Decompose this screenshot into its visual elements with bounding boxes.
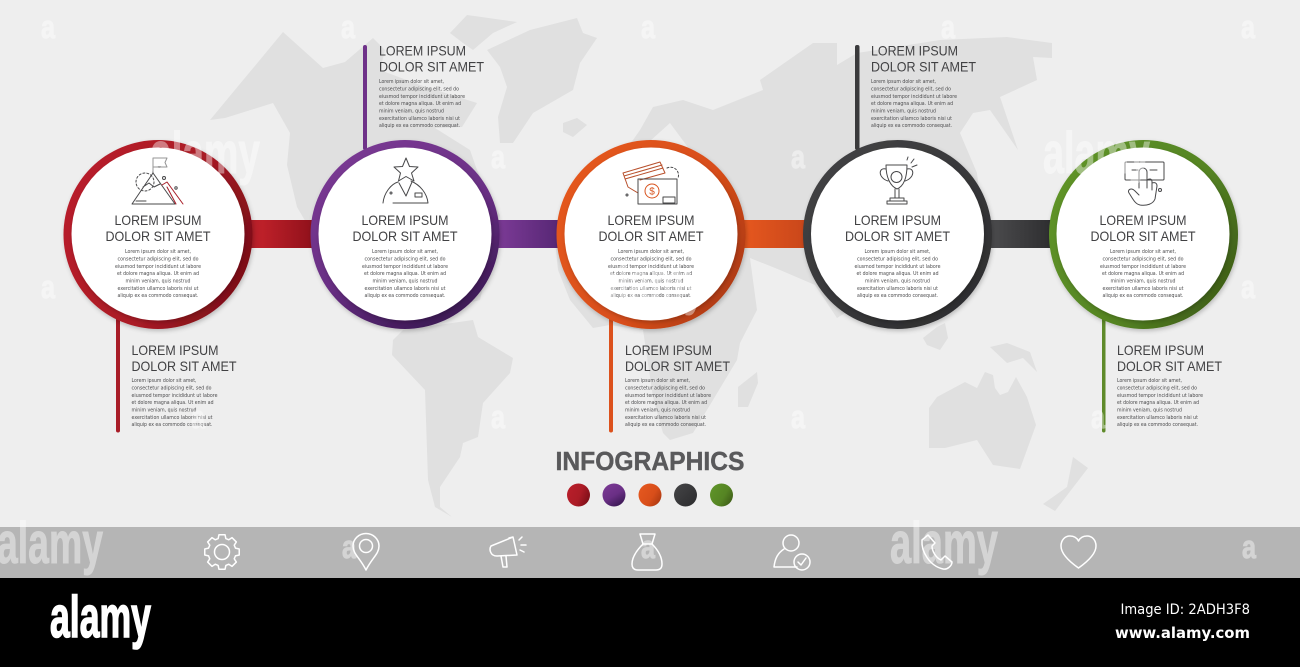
heading: LOREM IPSUM	[114, 212, 202, 228]
watermark overlay: a	[791, 139, 805, 175]
side text block: red: eiusmod tempor incididunt ut labore	[132, 393, 218, 399]
side text block: red	[132, 342, 237, 428]
icon: money bag	[632, 534, 662, 570]
side text block: orange: consectetur adipiscing elit, sed do	[625, 385, 705, 391]
body text: consectetur adipiscing elit, sed do	[857, 256, 938, 262]
icon: location pin	[353, 534, 379, 570]
watermark overlay: a	[41, 9, 55, 45]
side text block: green: DOLOR SIT AMET	[1117, 358, 1222, 374]
side text block: green: minim veniam, quis nostrud	[1117, 408, 1182, 414]
body text: et dolore magna aliqua. Ut enim ad	[117, 271, 199, 277]
body text: minim veniam, quis nostrud	[372, 278, 438, 284]
body text: consectetur adipiscing elit, sed do	[364, 256, 446, 262]
watermark overlay: a	[41, 269, 55, 305]
side text block: green: exercitation ullamco laboris nisi ut	[1117, 415, 1198, 421]
side text block: charcoal: DOLOR SIT AMET	[871, 58, 976, 74]
watermark overlay: alamy	[597, 251, 705, 316]
side text block: orange: DOLOR SIT AMET	[625, 358, 730, 374]
circle 1: red	[64, 140, 252, 329]
side text block: purple: Lorem ipsum dolor sit amet,	[379, 79, 444, 85]
side text block: purple	[379, 42, 484, 129]
body text: exercitation ullamco laboris nisi ut	[118, 286, 198, 292]
watermark overlay: a	[341, 9, 355, 45]
footer image id: Image ID: 2ADH3F8	[1120, 602, 1250, 618]
body text	[854, 249, 940, 299]
body text: eiusmod tempor incididunt ut labore	[115, 264, 201, 270]
black footer	[0, 578, 1300, 667]
watermark overlay: a	[1091, 399, 1105, 435]
body text: Lorem ipsum dolor sit amet,	[618, 249, 684, 255]
body text: exercitation ullamco laboris nisi ut	[610, 286, 692, 292]
side text block: charcoal: consectetur adipiscing elit, sed do	[871, 86, 951, 92]
circle 5: green: DOLOR SIT AMET	[1090, 228, 1196, 244]
body text: exercitation ullamco laboris nisi ut	[857, 286, 938, 292]
circle 4: charcoal: DOLOR SIT AMET	[845, 228, 950, 244]
body text: eiusmod tempor incididunt ut labore	[362, 264, 448, 270]
side text block: red: LOREM IPSUM	[132, 342, 218, 358]
body text: Lorem ipsum dolor sit amet,	[864, 249, 931, 255]
side text block: purple: aliquip ex ea commodo consequat.	[379, 123, 460, 129]
title: INFOGRAPHICS	[556, 448, 744, 476]
page background	[0, 0, 1300, 527]
body text: exercitation ullamco laboris nisi ut	[364, 286, 446, 292]
side text block: charcoal: minim veniam, quis nostrud	[871, 108, 936, 114]
colour legend dots	[567, 484, 733, 506]
side text block: purple: eiusmod tempor incididunt ut labore	[379, 94, 465, 100]
icon: card and money	[623, 162, 679, 204]
side text block: charcoal: Lorem ipsum dolor sit amet,	[871, 79, 936, 85]
body text: aliquip ex ea commodo consequat.	[610, 293, 692, 299]
body text: Lorem ipsum dolor sit amet,	[372, 249, 438, 255]
side text block: red: Lorem ipsum dolor sit amet,	[132, 378, 197, 384]
body text	[1100, 249, 1186, 299]
heading: LOREM IPSUM	[854, 212, 941, 228]
icon: gear	[205, 535, 239, 569]
watermark overlay: alamy	[1043, 121, 1150, 186]
icon: mountain with flag	[132, 158, 183, 204]
icon: star and person	[383, 158, 428, 203]
side text block: purple: LOREM IPSUM	[379, 42, 466, 58]
side text block: green: eiusmod tempor incididunt ut labore	[1117, 393, 1203, 399]
circle 2: purple	[310, 140, 500, 329]
icon: heart	[1061, 536, 1096, 568]
side text block: red: aliquip ex ea commodo consequat.	[132, 422, 213, 428]
body text: et dolore magna aliqua. Ut enim ad	[610, 271, 692, 277]
heading: LOREM IPSUM	[608, 212, 694, 228]
circle 5: green	[1049, 140, 1238, 329]
watermark overlay: alamy	[150, 121, 260, 186]
watermark overlay: a	[1241, 9, 1255, 45]
footer logo: alamy	[50, 585, 151, 650]
circle 3: orange: DOLOR SIT AMET	[598, 228, 704, 244]
heading: LOREM IPSUM	[1100, 212, 1186, 228]
side text block: green: Lorem ipsum dolor sit amet,	[1117, 378, 1182, 384]
watermark overlay: a	[941, 9, 955, 45]
side text block: red: et dolore magna aliqua. Ut enim ad	[132, 400, 214, 406]
body text: Lorem ipsum dolor sit amet,	[125, 249, 191, 255]
side text block: orange: exercitation ullamco laboris nisi ut	[625, 415, 706, 421]
footer url: www.alamy.com	[1115, 624, 1250, 642]
body text: et dolore magna aliqua. Ut enim ad	[856, 271, 938, 277]
side text block: charcoal	[871, 42, 976, 129]
side text block: green: et dolore magna aliqua. Ut enim ad	[1117, 400, 1199, 406]
side text block: orange: LOREM IPSUM	[625, 342, 712, 358]
body text: et dolore magna aliqua. Ut enim ad	[364, 271, 446, 277]
body text: exercitation ullamco laboris nisi ut	[1102, 286, 1184, 292]
icon band	[0, 527, 1300, 578]
circle 1: red: DOLOR SIT AMET	[106, 228, 211, 244]
side text block: red: minim veniam, quis nostrud	[132, 408, 196, 414]
side text block: red: consectetur adipiscing elit, sed do	[132, 385, 212, 391]
side text block: green: consectetur adipiscing elit, sed do	[1117, 385, 1197, 391]
watermark overlay: a	[641, 9, 655, 45]
body text: eiusmod tempor incididunt ut labore	[608, 264, 694, 270]
body text: eiusmod tempor incididunt ut labore	[854, 264, 940, 270]
side text block: purple: exercitation ullamco laboris nisi ut	[379, 116, 460, 122]
side text block: green: aliquip ex ea commodo consequat.	[1117, 422, 1198, 428]
body text	[115, 249, 201, 299]
side text block: charcoal: aliquip ex ea commodo consequat.	[871, 123, 952, 129]
side text block: red: exercitation ullamco laboris nisi ut	[132, 415, 212, 421]
world map background	[210, 15, 1088, 517]
body text: aliquip ex ea commodo consequat.	[857, 293, 938, 299]
side text block: orange: Lorem ipsum dolor sit amet,	[625, 378, 690, 384]
side text block: orange: aliquip ex ea commodo consequat.	[625, 422, 706, 428]
circle 4: charcoal	[803, 140, 992, 329]
watermark overlay: a	[641, 529, 655, 565]
connector bars between circles	[245, 220, 1055, 248]
body text: minim veniam, quis nostrud	[865, 278, 930, 284]
icon: hand and banknote	[1125, 162, 1164, 205]
body text: minim veniam, quis nostrud	[618, 278, 684, 284]
side text block: red: DOLOR SIT AMET	[132, 358, 237, 374]
side text block: orange: minim veniam, quis nostrud	[625, 408, 690, 414]
side text block: charcoal: LOREM IPSUM	[871, 42, 958, 58]
side text block: green: LOREM IPSUM	[1117, 342, 1204, 358]
body text: aliquip ex ea commodo consequat.	[118, 293, 199, 299]
watermark overlay: alamy	[0, 511, 103, 576]
body text: consectetur adipiscing elit, sed do	[1102, 256, 1184, 262]
circle 2: purple: DOLOR SIT AMET	[352, 228, 458, 244]
heading: LOREM IPSUM	[362, 212, 448, 228]
side text block: charcoal: exercitation ullamco laboris nisi ut	[871, 116, 952, 122]
leader lines	[116, 45, 1106, 432]
watermark overlay: a	[1242, 529, 1256, 565]
watermark overlay: alamy	[890, 511, 998, 576]
icon: card and money: $	[649, 186, 655, 198]
side text block: orange	[625, 342, 730, 428]
body text	[362, 249, 448, 299]
body text: et dolore magna aliqua. Ut enim ad	[1102, 271, 1184, 277]
icon: user with check	[774, 535, 810, 570]
side text block: purple: minim veniam, quis nostrud	[379, 108, 444, 114]
side text block: purple: consectetur adipiscing elit, sed do	[379, 86, 459, 92]
body text	[608, 249, 694, 299]
side text block: purple: DOLOR SIT AMET	[379, 58, 484, 74]
side text block: orange: et dolore magna aliqua. Ut enim ad	[625, 400, 707, 406]
body text: consectetur adipiscing elit, sed do	[118, 256, 198, 262]
body text: aliquip ex ea commodo consequat.	[1102, 293, 1184, 299]
icon: megaphone	[490, 537, 526, 567]
side text block: charcoal: et dolore magna aliqua. Ut enim ad	[871, 101, 953, 107]
icon: trophy	[880, 157, 917, 204]
watermark overlay: a	[491, 399, 505, 435]
watermark overlay: a	[342, 529, 356, 565]
body text: consectetur adipiscing elit, sed do	[610, 256, 692, 262]
body text: Lorem ipsum dolor sit amet,	[1110, 249, 1176, 255]
body text: minim veniam, quis nostrud	[1110, 278, 1176, 284]
watermark overlay: a	[491, 139, 505, 175]
watermark overlay: a	[791, 399, 805, 435]
side text block: orange: eiusmod tempor incididunt ut labore	[625, 393, 711, 399]
body text: eiusmod tempor incididunt ut labore	[1100, 264, 1186, 270]
side text block: green	[1117, 342, 1222, 428]
body text: aliquip ex ea commodo consequat.	[364, 293, 446, 299]
watermark overlay: a	[1241, 269, 1255, 305]
body text: minim veniam, quis nostrud	[126, 278, 190, 284]
icon: phone	[922, 535, 952, 569]
circle 3: orange	[556, 140, 746, 329]
side text block: charcoal: eiusmod tempor incididunt ut labore	[871, 94, 957, 100]
side text block: purple: et dolore magna aliqua. Ut enim ad	[379, 101, 461, 107]
watermark overlay: a	[191, 399, 205, 435]
